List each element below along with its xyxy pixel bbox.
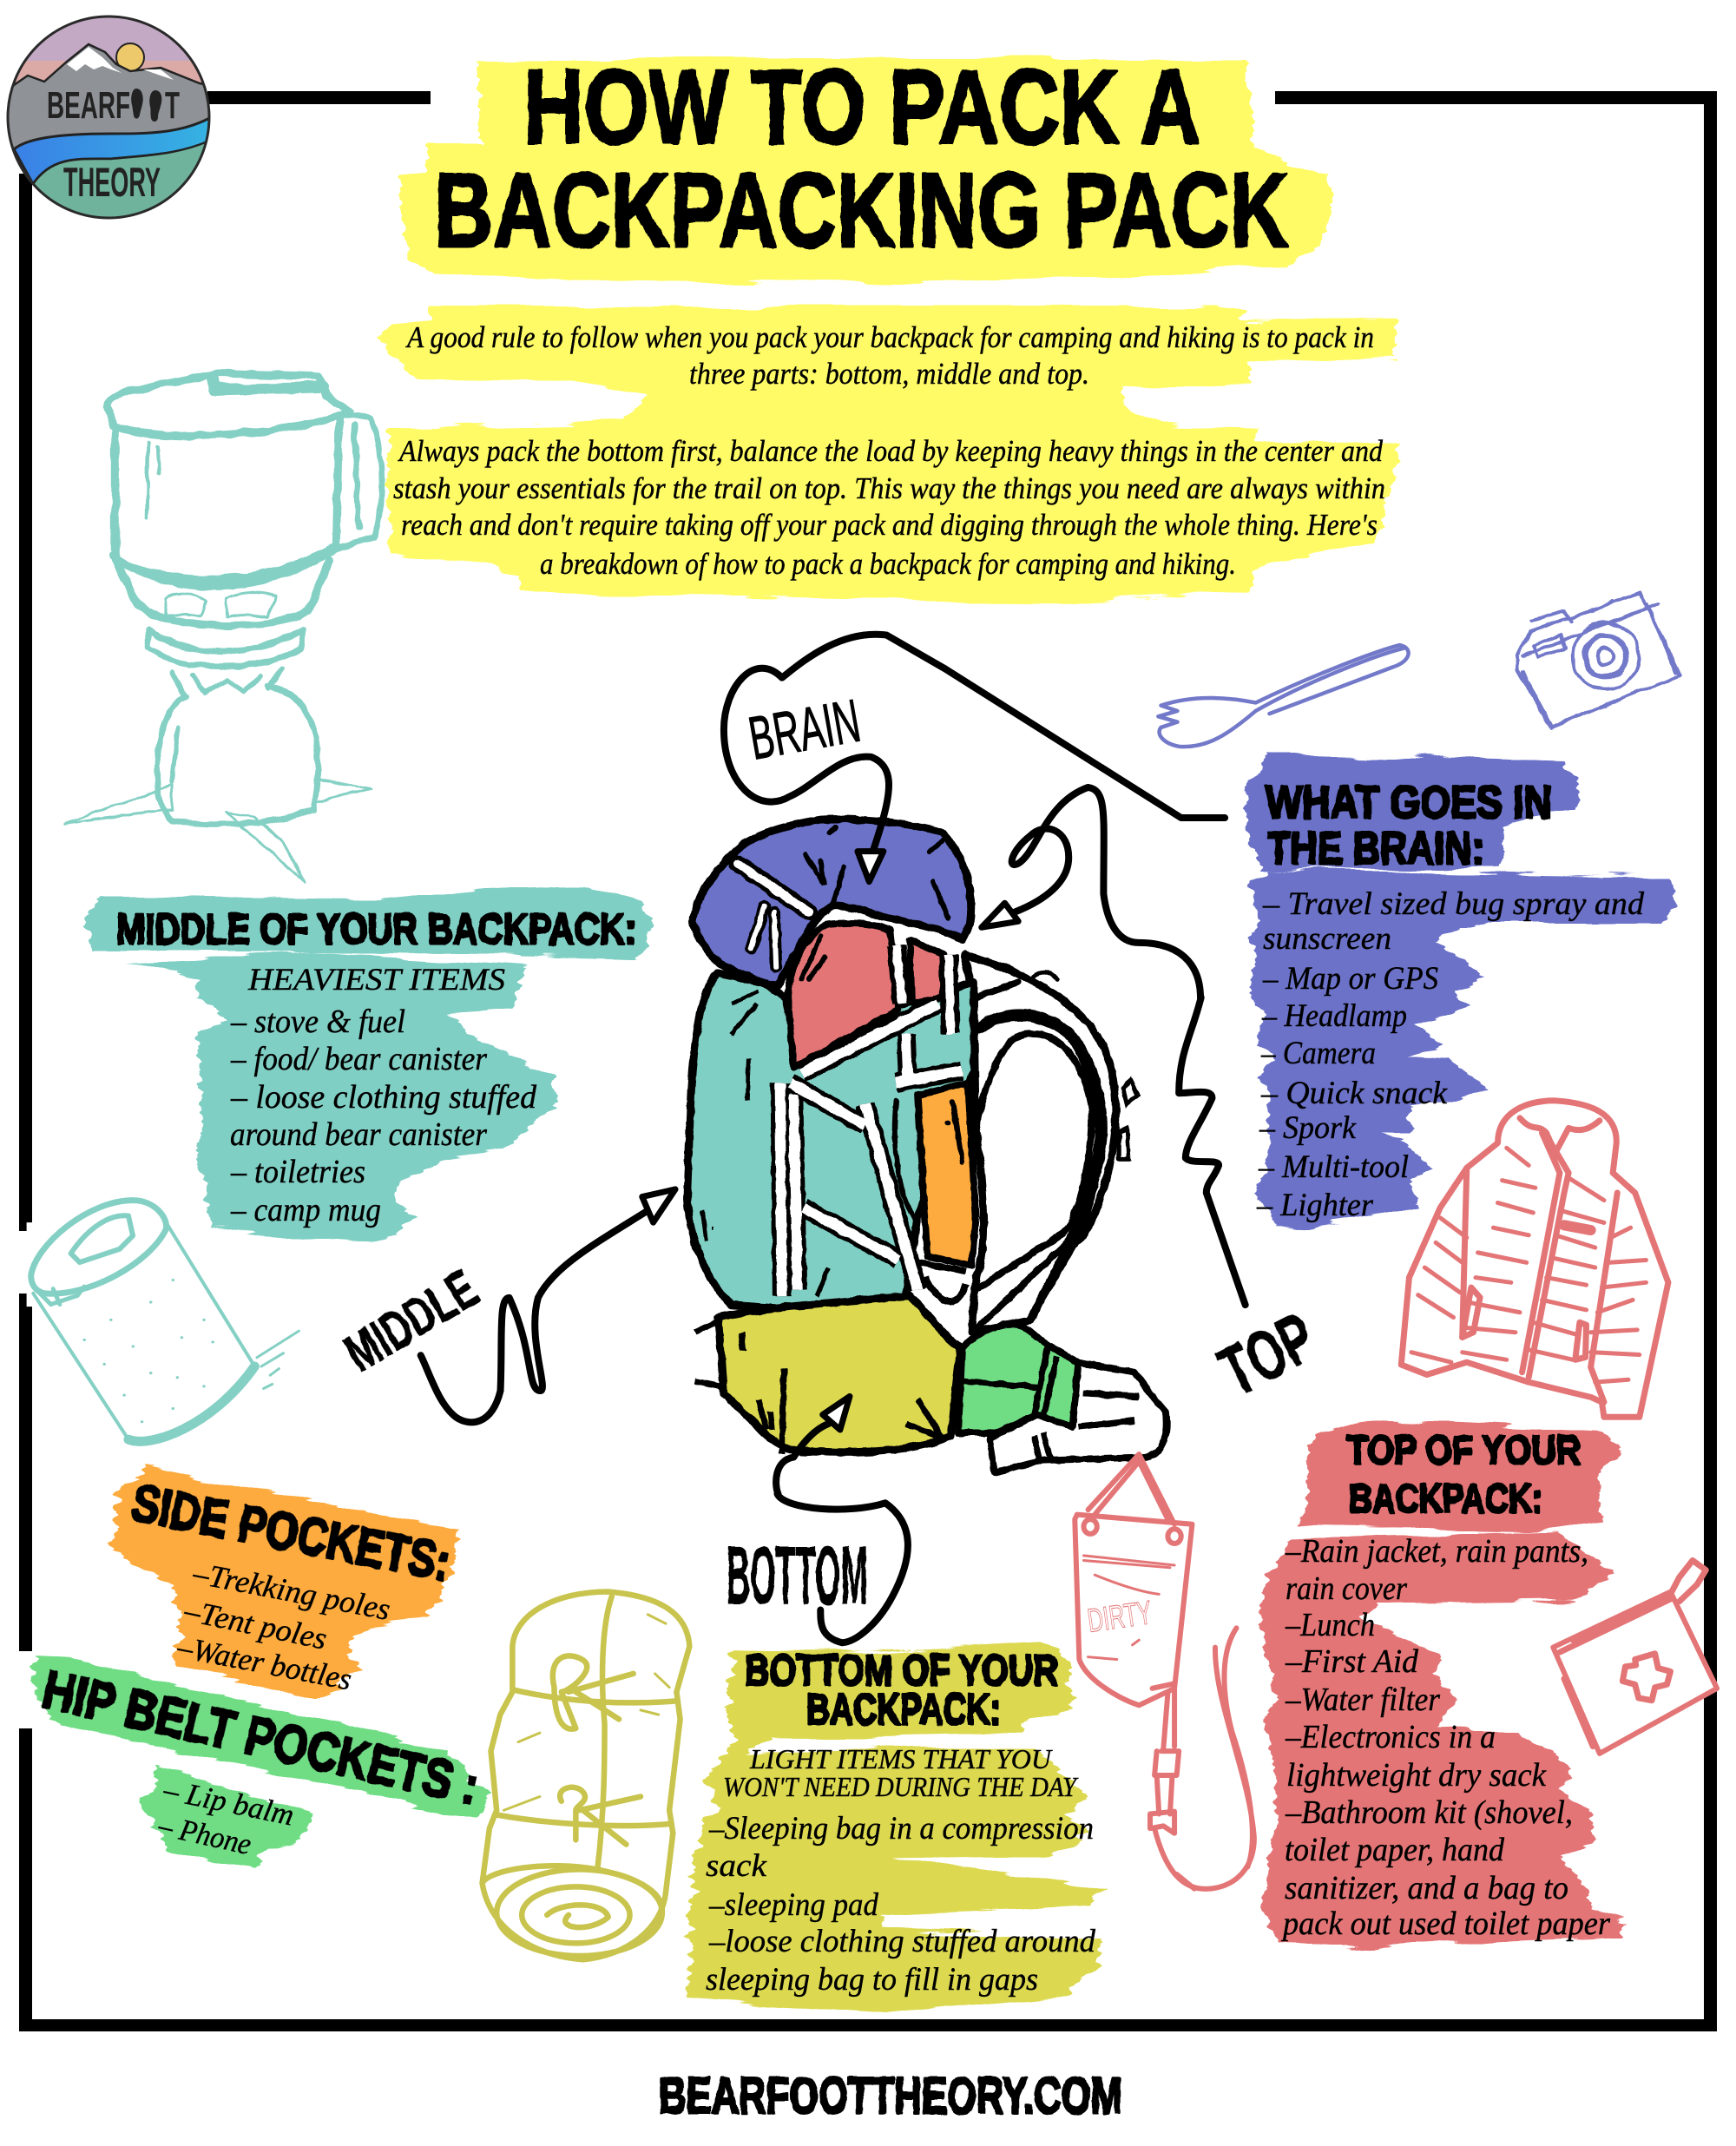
text: BOTTOM (727, 1530, 868, 1622)
middle list: HEAVIEST ITEMS (247, 962, 505, 997)
brain list: – Quick snack (1260, 1076, 1448, 1111)
label: middle: MIDDLE (335, 1259, 489, 1384)
logo: BEARF (47, 84, 130, 127)
bottom heading: BOTTOM OF YOUR (745, 1646, 1058, 1695)
top list (1259, 1531, 1628, 1949)
logo: T (165, 84, 180, 127)
bottom heading: BACKPACK: (806, 1685, 1001, 1734)
middle heading: MIDDLE OF YOUR BACKPACK: (116, 906, 636, 953)
bottom list: –sleeping pad (708, 1887, 878, 1923)
icon: water filter bag (1075, 1454, 1254, 1889)
logo: THEORY (63, 159, 161, 205)
title (399, 48, 1332, 283)
top list: toilet paper, hand (1285, 1832, 1505, 1868)
bottom list (706, 1743, 1095, 1998)
brain heading (1247, 754, 1580, 874)
top list: pack out used toilet paper (1280, 1906, 1610, 1942)
brain heading: WHAT GOES IN (1266, 777, 1552, 828)
top list: lightweight dry sack (1286, 1757, 1547, 1794)
brain list: – Headlamp (1261, 998, 1407, 1034)
hip belt olive (718, 1296, 960, 1452)
footer url: BEARFOOTTHEORY.COM (659, 2068, 1122, 2124)
belt details (694, 1320, 1057, 1460)
brain heading: THE BRAIN: (1267, 823, 1484, 874)
brain list: – Travel sized bug spray and (1262, 886, 1645, 922)
frame straps (702, 945, 966, 1301)
title: BACKPACKING PACK (434, 151, 1289, 269)
arrow: bottom (776, 1396, 908, 1642)
icon: first aid kit (1553, 1560, 1717, 1754)
intro text block: stash your essentials for the trail on top. This way the things you need are always within (393, 471, 1385, 505)
top list: –Water filter (1285, 1682, 1440, 1718)
brain list (1250, 869, 1677, 1228)
brain list: – Spork (1259, 1110, 1357, 1146)
top heading (1299, 1420, 1624, 1531)
middle list: – toiletries (230, 1154, 365, 1190)
top list: –Bathroom kit (shovel, (1285, 1794, 1573, 1831)
intro text block: reach and don't require taking off your pack and digging through the whole thing. Here's (401, 508, 1378, 542)
middle list: – camp mug (230, 1192, 381, 1228)
icon: camp mug (27, 1201, 299, 1441)
panel: hip belt pockets: – Phone (155, 1808, 254, 1861)
brain list: – Multi-tool (1258, 1149, 1409, 1185)
middle list: around bear canister (230, 1116, 487, 1153)
brain list: – Map or GPS (1262, 961, 1438, 997)
top list: –Electronics in a (1285, 1719, 1496, 1755)
coral pocket (788, 923, 944, 1068)
panel: what goes in the brain (1247, 754, 1677, 1228)
intro text block: Always pack the bottom first, balance the load by keeping heavy things in the center and (398, 434, 1383, 468)
panel: side pockets: SIDE POCKETS: (128, 1473, 455, 1592)
middle list (122, 952, 557, 1242)
top list: –Lunch (1285, 1607, 1375, 1643)
top list: –First Aid (1285, 1643, 1419, 1680)
intro text block: A good rule to follow when you pack your backpack for camping and hiking is to pack in (405, 320, 1374, 354)
bottom heading (745, 1646, 1058, 1734)
bottom list: –loose clothing stuffed around (708, 1924, 1095, 1959)
bottom list: sack (706, 1848, 767, 1884)
logo (7, 16, 210, 219)
top heading: BACKPACK: (1349, 1476, 1542, 1521)
title: HOW TO PACK A (523, 48, 1200, 166)
harness straps (964, 955, 1138, 1333)
bottom list: sleeping bag to fill in gaps (706, 1962, 1038, 1998)
arrow: top (982, 787, 1246, 1305)
orange pocket (917, 1083, 976, 1266)
label: top: TOP (1207, 1298, 1328, 1412)
top list: –Rain jacket, rain pants, (1285, 1533, 1588, 1570)
panel: hip belt pockets: HIP BELT POCKETS : (37, 1659, 484, 1817)
panel: top of your backpack (1259, 1420, 1628, 1949)
brain list: sunscreen (1263, 921, 1391, 957)
icon: sleeping bag roll (483, 1592, 689, 1959)
panel: hip belt pockets: – Lip balm (160, 1772, 297, 1833)
bottom list: –Sleeping bag in a compression (708, 1811, 1094, 1846)
brain list: – Lighter (1256, 1188, 1374, 1223)
top heading: TOP OF YOUR (1347, 1427, 1581, 1472)
panel: side pockets: –Water bottles (174, 1629, 354, 1697)
panel: side pockets: –Trekking poles (190, 1555, 393, 1627)
intro text block: a breakdown of how to pack a backpack for camping and hiking. (540, 547, 1236, 581)
icon: camp stove (64, 373, 381, 881)
intro text block: three parts: bottom, middle and top. (689, 357, 1089, 391)
middle list: – loose clothing stuffed (230, 1079, 537, 1116)
main body teal (687, 973, 974, 1308)
brain lid (692, 820, 971, 985)
panel: side pockets (112, 1465, 457, 1701)
middle list: – stove & fuel (230, 1004, 405, 1040)
panel: side pockets: –Tent poles (181, 1592, 330, 1656)
panel: bottom of your backpack (684, 1642, 1101, 2013)
middle heading (84, 886, 654, 959)
bottom list: LIGHT ITEMS THAT YOU (749, 1743, 1053, 1774)
icon: puffy jacket (1401, 1101, 1668, 1417)
bottom list: WON'T NEED DURING THE DAY (723, 1771, 1079, 1802)
intro text block (379, 306, 1399, 601)
hip belt green (958, 1324, 1078, 1433)
icon: spork (1158, 645, 1409, 747)
top list: sanitizer, and a bag to (1285, 1870, 1568, 1906)
text: dirty label: DIRTY (1085, 1595, 1154, 1640)
panel: middle of your backpack (84, 886, 654, 1242)
brain lid details (738, 827, 949, 979)
middle list: – food/ bear canister (230, 1041, 487, 1077)
backpack illustration (687, 820, 1167, 1472)
arrow: brain (724, 635, 1225, 882)
icon: camera (1518, 593, 1681, 727)
hip strap (990, 1363, 1167, 1472)
brain list: – Camera (1260, 1036, 1376, 1071)
top list: rain cover (1286, 1570, 1407, 1607)
arrow: middle (421, 1189, 675, 1422)
label: brain: BRAIN (744, 687, 865, 773)
